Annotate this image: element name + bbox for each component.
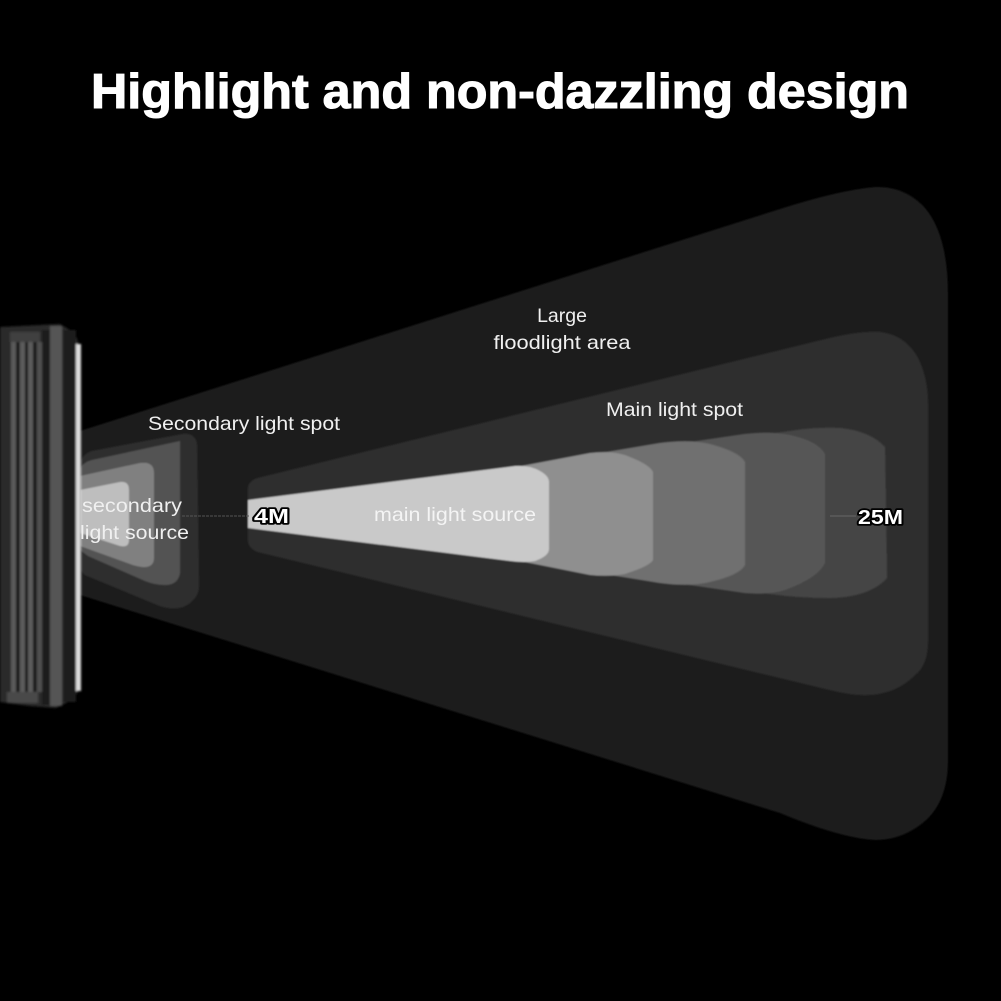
device: lamp side view [0, 324, 81, 708]
label: secondary light spot: Secondary light spot [148, 413, 341, 435]
label: large floodlight area: Large [537, 305, 587, 327]
distance line [182, 515, 856, 517]
secondary spot middle [80, 441, 180, 585]
label: 4M: 4M [254, 506, 289, 528]
main beam 25M layer [500, 428, 887, 598]
label: main light source: main light source [374, 504, 536, 526]
main beam layer 3 [500, 433, 825, 594]
label: main light spot: Main light spot [606, 399, 744, 421]
secondary light source area [80, 482, 129, 546]
main beam layer 2 [500, 441, 745, 585]
label: 25M: 25M [858, 507, 903, 529]
diagram: light beam layers [80, 187, 948, 840]
secondary spot inner [80, 463, 154, 567]
floodlight area [80, 187, 948, 840]
main beam layer 1 [500, 452, 653, 576]
main light spot outer area [248, 332, 928, 695]
title: Highlight and non-dazzling design [91, 65, 909, 119]
label: secondary light source: light source [80, 522, 189, 544]
label: large floodlight area: floodlight area [494, 332, 631, 354]
main light source area [248, 466, 549, 562]
secondary spot outer [80, 434, 199, 608]
label: secondary light source: secondary [82, 495, 182, 517]
